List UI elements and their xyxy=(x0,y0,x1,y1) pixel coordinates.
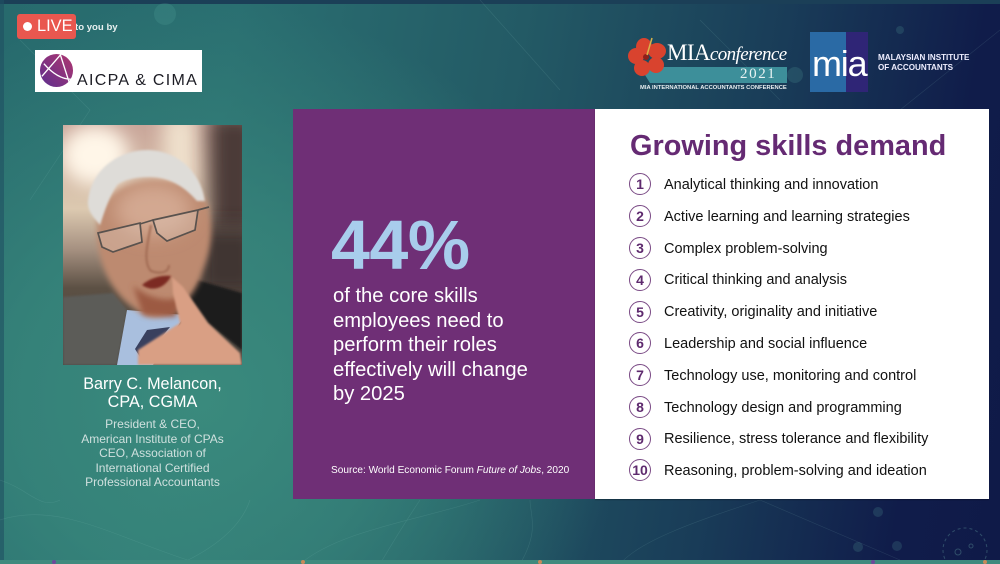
item 5 xyxy=(629,301,651,323)
logo: MIA conference 2021 xyxy=(628,38,787,91)
glasses xyxy=(98,207,209,252)
speaker name: CPA, CGMA xyxy=(108,393,197,411)
panel: 44 percent statistic xyxy=(293,109,595,499)
skills list: Critical thinking and analysis xyxy=(664,272,847,288)
speaker titles xyxy=(81,417,224,489)
neck and face xyxy=(97,180,211,317)
item 4: 4 xyxy=(636,272,644,288)
logo: MIA conference 2021: MIAconference xyxy=(667,40,787,65)
statistic description: of the core skills xyxy=(333,285,478,307)
source note: Source: World Economic Forum Future of Jobs, 2020 xyxy=(331,465,569,476)
logo: AICPA & CIMA xyxy=(35,50,202,92)
item 8: 8 xyxy=(636,399,644,415)
item 8 xyxy=(629,396,651,418)
skills list: Complex problem-solving xyxy=(664,241,828,257)
speaker name xyxy=(83,375,222,411)
jacket right xyxy=(188,280,242,350)
item 10 xyxy=(629,459,651,481)
live badge: LIVE xyxy=(37,17,73,35)
item 5: 5 xyxy=(636,304,644,320)
skills list: Resilience, stress tolerance and flexibility xyxy=(664,431,928,447)
statistic description: perform their roles xyxy=(333,334,497,356)
logo: Malaysian Institute of Accountants xyxy=(810,32,970,92)
skills list: Technology design and programming xyxy=(664,400,902,416)
logo: AICPA & CIMA: AICPA & CIMA xyxy=(77,72,198,89)
skills list xyxy=(629,173,928,481)
item 7: 7 xyxy=(636,367,644,383)
live badge xyxy=(17,14,76,39)
speaker name: Barry C. Melancon, xyxy=(83,375,222,393)
item 9: 9 xyxy=(636,431,644,447)
item 1: 1 xyxy=(636,176,644,192)
mouth xyxy=(142,276,171,289)
logo: Malaysian Institute of Accountants: mia xyxy=(812,43,866,84)
speaker titles: American Institute of CPAs xyxy=(81,432,224,446)
hair xyxy=(88,150,205,225)
skills list: Active learning and learning strategies xyxy=(664,209,910,225)
statistic number: 44% xyxy=(331,206,470,284)
speaker titles: Professional Accountants xyxy=(85,475,220,489)
panel: growing skills demand xyxy=(595,109,989,499)
shirt xyxy=(117,310,185,365)
logo: Malaysian Institute of Accountants: OF ACCOUNTANTS xyxy=(878,63,953,72)
item 9 xyxy=(629,428,651,450)
logo: Malaysian Institute of Accountants: MALAYSIAN INSTITUTE xyxy=(878,53,969,62)
skills list: Creativity, originality and initiative xyxy=(664,304,877,320)
item 7 xyxy=(629,364,651,386)
statistic description: effectively will change xyxy=(333,358,528,380)
speaker titles: President & CEO, xyxy=(105,417,200,431)
item 4 xyxy=(629,269,651,291)
speaker caption xyxy=(81,375,224,489)
item 2 xyxy=(629,205,651,227)
brought to you by text: to you by xyxy=(75,22,118,33)
statistic description xyxy=(333,285,528,405)
speaker titles: CEO, Association of xyxy=(99,446,206,460)
statistic description: employees need to xyxy=(333,310,504,332)
skills list: Leadership and social influence xyxy=(664,336,867,352)
skills list: Technology use, monitoring and control xyxy=(664,368,916,384)
item 6 xyxy=(629,332,651,354)
skills list: Analytical thinking and innovation xyxy=(664,177,878,193)
item 6: 6 xyxy=(636,335,644,351)
item 3 xyxy=(629,237,651,259)
skills list: Reasoning, problem-solving and ideation xyxy=(664,463,927,479)
heading: Growing skills demand xyxy=(630,130,946,162)
logo: MIA conference 2021: MIA INTERNATIONAL ACCOUNTANTS CONFERENCE xyxy=(640,85,787,91)
tie xyxy=(135,327,170,357)
statistic description: by 2025 xyxy=(333,383,405,405)
item 1 xyxy=(629,173,651,195)
speaker titles: International Certified xyxy=(95,461,210,475)
hand xyxy=(138,277,242,365)
item 3: 3 xyxy=(636,240,644,256)
speaker photo xyxy=(63,125,242,365)
item 2: 2 xyxy=(636,208,644,224)
logo: MIA conference 2021: 2021 xyxy=(740,66,776,82)
jacket left xyxy=(63,293,127,365)
item 10: 10 xyxy=(632,462,648,478)
